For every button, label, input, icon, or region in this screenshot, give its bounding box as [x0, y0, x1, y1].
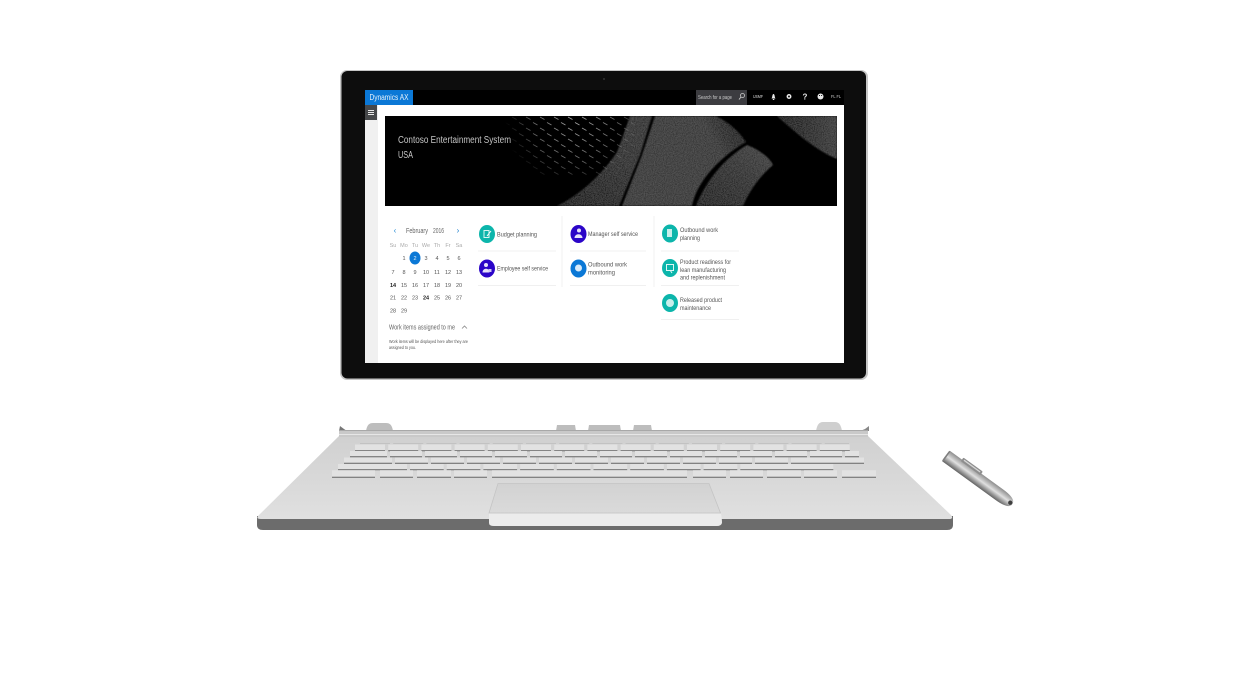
tile: Budget planning: Budget planning [497, 232, 537, 238]
keyboard front edge [257, 516, 953, 530]
weekday labels: Su [390, 243, 396, 249]
weekday labels: Tu [412, 243, 418, 249]
tile: Manager self service: Manager self service [588, 231, 638, 238]
pen barrel [942, 448, 1018, 509]
icon: collapse chevron [462, 326, 467, 328]
trackpad [489, 484, 720, 513]
calendar days: 13 [456, 270, 462, 276]
tile: Outbound work monitoring [570, 260, 628, 278]
weekday labels: We [422, 243, 430, 249]
banner dotted highlights [508, 116, 635, 175]
calendar days: 27 [456, 296, 462, 302]
Dynamics AX tab: Dynamics AX [370, 93, 409, 102]
tile dividers [478, 216, 739, 320]
calendar days: 9 [413, 270, 417, 276]
top navigation bar [365, 90, 844, 105]
calendar header: › [457, 226, 460, 235]
side rail [365, 105, 378, 363]
weekday labels: Fr [445, 243, 451, 249]
calendar days: 28 [390, 308, 396, 314]
icon: bell [772, 94, 776, 100]
key row 1 [355, 448, 853, 451]
calendar days: 6 [457, 256, 461, 262]
key row 3 [344, 460, 864, 463]
icon: smiley [818, 94, 824, 100]
keys [332, 444, 877, 477]
banner title: Contoso Entertainment System [398, 135, 511, 146]
tile: Budget planning [479, 225, 537, 243]
calendar days: 12 [445, 270, 451, 276]
work items message: Work items will be displayed here after they are [389, 339, 468, 345]
tile: Product readiness [662, 259, 732, 282]
tile: Outbound work monitoring: monitoring [588, 270, 615, 276]
calendar days: 5 [446, 256, 450, 262]
tile: Released product maintenance: Released product [680, 297, 722, 304]
calendar header: 2016 [433, 228, 444, 235]
key row 2 [350, 454, 859, 457]
trackpad lip [489, 514, 722, 526]
banner photo texture [557, 116, 837, 206]
calendar days: 21 [390, 296, 396, 302]
tile: Released product maintenance [662, 294, 722, 312]
calendar days: 2 [413, 256, 417, 262]
calendar days: 20 [456, 283, 462, 289]
weekday labels: Th [434, 243, 440, 249]
banner [385, 116, 837, 206]
calendar days: 16 [412, 283, 418, 289]
calendar days: 17 [423, 283, 429, 289]
weekday labels: Sa [456, 243, 463, 249]
calendar days: 25 [434, 296, 440, 302]
calendar days: 7 [391, 270, 395, 276]
key row 5 [332, 474, 877, 477]
calendar days: 23 [412, 296, 418, 302]
user initials: FL FL [831, 94, 841, 99]
weekday labels: Mo [400, 243, 408, 249]
screen [365, 90, 844, 363]
hinge tabs [339, 422, 869, 431]
weekday labels [390, 243, 463, 249]
work items panel: assigned to you. [389, 345, 416, 351]
calendar days: 29 [401, 308, 407, 314]
tablet [340, 70, 868, 380]
calendar header [394, 226, 460, 235]
tile: Outbound work monitoring: Outbound work [588, 262, 628, 268]
tile: Product readiness: lean manufacturing [680, 267, 726, 274]
tablet body [340, 70, 868, 380]
calendar days: 18 [434, 283, 440, 289]
calendar days: 3 [424, 256, 428, 262]
calendar days: 8 [402, 270, 406, 276]
calendar days: 10 [423, 270, 429, 276]
pen clip [961, 458, 983, 475]
calendar days: 19 [445, 283, 451, 289]
selected day [410, 252, 420, 264]
work items heading: Work items assigned to me [389, 324, 455, 332]
keyboard deck [257, 436, 952, 519]
tile: Outbound work planning: Outbound work [680, 227, 719, 234]
calendar days: 14 [390, 283, 397, 289]
tile: Outbound work planning: planning [680, 235, 700, 242]
stylus pen [942, 448, 1018, 509]
tile: Outbound work planning [662, 224, 719, 242]
calendar header: February [406, 228, 428, 235]
icon: help: ? [803, 92, 808, 102]
icon: gear [787, 95, 791, 98]
company label: USMF [753, 94, 763, 99]
calendar days [390, 256, 462, 314]
calendar days: 4 [435, 256, 439, 262]
banner subtitle: USA [398, 150, 413, 161]
search box [696, 90, 747, 105]
tile: Product readiness: and replenishment [680, 274, 725, 282]
calendar days: 24 [423, 296, 430, 302]
tile: Manager self service [570, 225, 638, 243]
function key row [360, 442, 849, 444]
calendar days: 22 [401, 296, 407, 302]
search box: Search for a page [698, 95, 732, 101]
tile: Employee self service: Employee self service [497, 266, 548, 272]
calendar days: 15 [401, 283, 407, 289]
tile: Employee self service [479, 260, 548, 278]
tile: Released product maintenance: maintenance [680, 305, 711, 312]
calendar [390, 226, 463, 314]
calendar days: 11 [434, 270, 440, 276]
hinge bar [339, 430, 868, 437]
tile: Product readiness: Product readiness for [680, 259, 732, 266]
key row 4 [338, 467, 870, 470]
calendar header: ‹ [394, 226, 397, 235]
work items panel [389, 324, 468, 351]
keyboard [257, 422, 953, 530]
calendar days: 26 [445, 296, 451, 302]
calendar days: 1 [402, 256, 406, 262]
Dynamics AX tab [365, 90, 413, 105]
